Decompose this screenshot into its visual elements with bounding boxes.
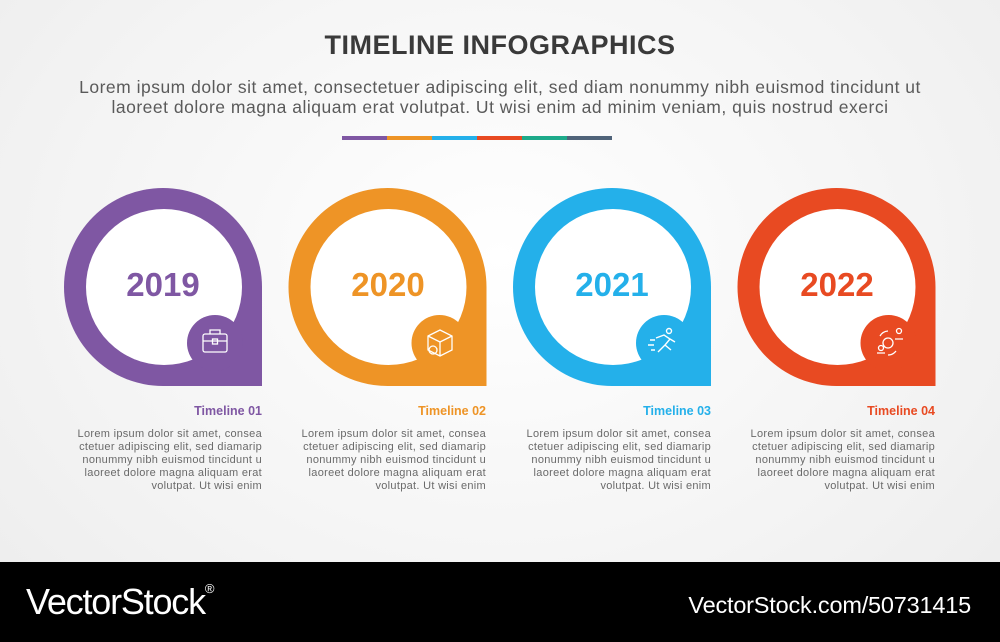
text: Timeline 03 body: ctetuer adipiscing elit, sed diamarip	[528, 441, 711, 453]
footer bar	[0, 562, 1000, 642]
icon: runner	[648, 328, 675, 352]
label: Timeline 02: Timeline 02	[418, 404, 486, 418]
title: TIMELINE INFOGRAPHICS	[324, 30, 676, 60]
subtitle text	[79, 77, 921, 117]
year 2020: 2020	[351, 266, 425, 303]
icon: box	[428, 330, 452, 356]
text: Timeline 03 body: nonummy nibh euismod tincidunt u	[531, 454, 711, 466]
text: Timeline 01 body	[78, 428, 262, 492]
shape: 2021	[513, 188, 711, 386]
text: Timeline 04 body	[751, 428, 935, 492]
year 2019: 2019	[126, 266, 200, 303]
text: Timeline 02 body: ctetuer adipiscing elit, sed diamarip	[303, 441, 486, 453]
text: Timeline 04 body: laoreet dolore magna aliquam erat	[758, 467, 935, 479]
text: Timeline 02 body: Lorem ipsum dolor sit amet, consea	[302, 428, 486, 440]
year 2021: 2021	[575, 266, 649, 303]
shape: 2019	[64, 188, 262, 386]
text: Timeline 04 body: Lorem ipsum dolor sit amet, consea	[751, 428, 935, 440]
subtitle text: Lorem ipsum dolor sit amet, consectetuer adipiscing elit, sed diam nonummy nibh euismod tincidunt ut	[79, 77, 921, 97]
color divider line	[342, 136, 612, 140]
text: Timeline 01 body: Lorem ipsum dolor sit amet, consea	[78, 428, 262, 440]
text: Timeline 02 body: nonummy nibh euismod tincidunt u	[306, 454, 486, 466]
label: Timeline 03: Timeline 03	[643, 404, 711, 418]
text: Timeline 03 body	[527, 428, 711, 492]
icon: exchange	[877, 328, 903, 355]
text: Timeline 03 body: volutpat. Ut wisi enim	[600, 480, 711, 492]
text: Timeline 02 body	[302, 428, 486, 492]
text: Timeline 01 body: volutpat. Ut wisi enim	[151, 480, 262, 492]
subtitle text: laoreet dolore magna aliquam erat volutpat. Ut wisi enim ad minim veniam, quis nostrud exerci	[112, 97, 888, 117]
shape: 2020	[288, 188, 486, 386]
year 2022: 2022	[800, 266, 874, 303]
text: Timeline 01 body: nonummy nibh euismod tincidunt u	[82, 454, 262, 466]
label: Timeline 04: Timeline 04	[867, 404, 935, 418]
text: Timeline 03 body: laoreet dolore magna aliquam erat	[534, 467, 711, 479]
text: Timeline 04 body: volutpat. Ut wisi enim	[824, 480, 935, 492]
footer logo: VectorStock®	[26, 581, 213, 622]
text: Timeline 03 body: Lorem ipsum dolor sit amet, consea	[527, 428, 711, 440]
text: Timeline 01 body: ctetuer adipiscing elit, sed diamarip	[79, 441, 262, 453]
icon: briefcase	[203, 330, 227, 352]
label: Timeline 01: Timeline 01	[194, 404, 262, 418]
text: Timeline 01 body: laoreet dolore magna aliquam erat	[85, 467, 262, 479]
text: Timeline 02 body: laoreet dolore magna aliquam erat	[309, 467, 486, 479]
text: Timeline 04 body: ctetuer adipiscing elit, sed diamarip	[752, 441, 935, 453]
text: Timeline 02 body: volutpat. Ut wisi enim	[375, 480, 486, 492]
shape: 2022	[738, 188, 936, 386]
text: Timeline 04 body: nonummy nibh euismod tincidunt u	[755, 454, 935, 466]
footer url: VectorStock.com/50731415	[688, 592, 971, 618]
